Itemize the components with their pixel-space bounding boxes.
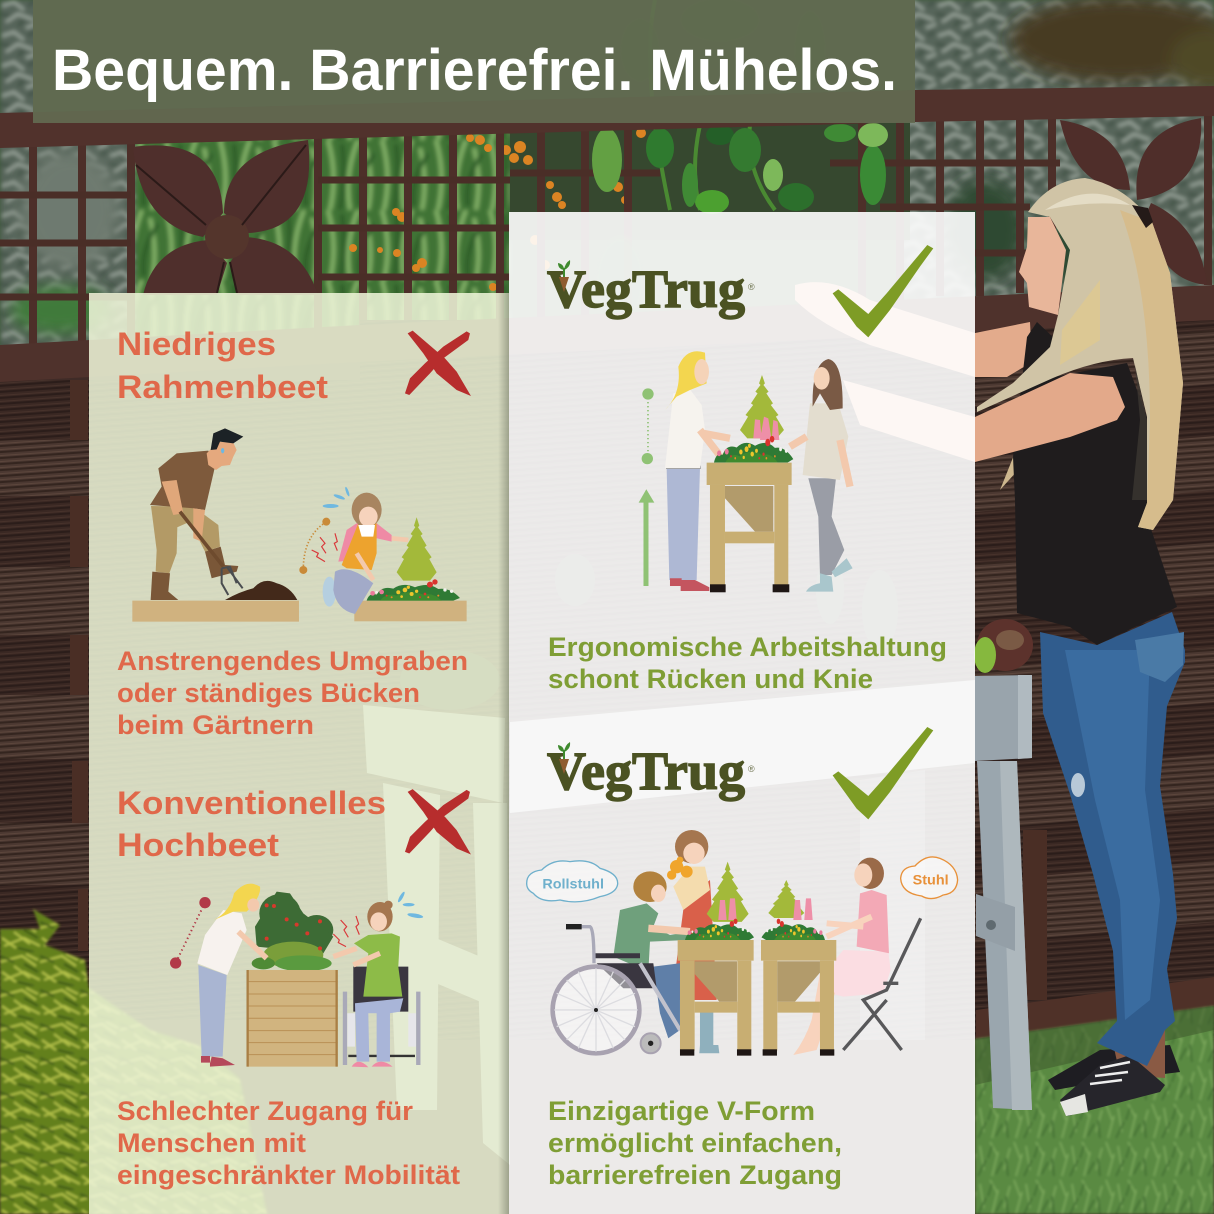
icon: green check 1: [833, 245, 933, 337]
woman in photo: [795, 178, 1185, 1116]
heading: Konventionelles Hochbeet: Hochbeet: [117, 827, 279, 863]
callout: Rollstuhl: Rollstuhl: [542, 875, 604, 891]
strain and posture marks: [170, 891, 424, 969]
grass: [975, 1006, 1214, 1214]
header band: [33, 0, 915, 123]
planters: [678, 940, 836, 1056]
florist woman: [667, 830, 719, 1053]
illustration: standing users at VegTrug planter: [639, 351, 853, 592]
text: Einzigartige V-Form: ermöglicht einfachen,: [548, 1128, 842, 1158]
text: Schlechter Zugang: eingeschränkter Mobilität: [117, 1160, 460, 1190]
text: Anstrengendes Umgraben: oder ständiges Bücken: [117, 678, 420, 708]
plants: [685, 862, 825, 940]
callout: Stuhl: Stuhl: [913, 872, 949, 888]
orange berries: [349, 128, 646, 291]
man: [150, 428, 243, 600]
bush: [0, 909, 267, 1214]
logo: VegTrug 2: VegTrug: [547, 741, 745, 801]
lattice: [33, 116, 1208, 345]
icon: green check 2: [833, 727, 933, 819]
text: Einzigartige V-Form: Einzigartige V-Form: [548, 1096, 815, 1126]
standing woman: [197, 884, 267, 1067]
panel: VegTrug: [509, 212, 975, 1214]
wheelchair woman: [333, 901, 418, 1067]
soil: [225, 581, 297, 600]
text: Ergonomische Arbeitshaltung: Ergonomische Arbeitshaltung: [548, 632, 947, 662]
woman: [323, 493, 408, 614]
text: Anstrengendes Umgraben: beim Gärtnern: [117, 710, 314, 740]
white planter in photo: [363, 675, 1032, 1165]
planter flowers and salad: [400, 554, 1033, 710]
title: Bequem. Barrierefrei. Mühelos.: [52, 38, 897, 103]
back arm: [795, 282, 1032, 377]
left rosette: [133, 140, 318, 295]
text: Ergonomische Arbeitshaltung: schont Rücken und Knie: [548, 664, 873, 694]
height marks: [639, 388, 654, 586]
pepper plant: [592, 0, 888, 560]
foliage behind lattice: [0, 0, 1214, 350]
illustration: digging man and kneeling woman at low beds: [132, 428, 467, 622]
face: [1019, 217, 1066, 315]
black top: [1013, 322, 1177, 645]
fence boards: [0, 285, 1214, 1040]
front arm: [843, 373, 1125, 462]
hair: [977, 178, 1183, 530]
text: Schlechter Zugang: Menschen mit: [117, 1128, 306, 1158]
jeans: [1040, 612, 1185, 1066]
top rail: [0, 86, 1214, 148]
planter: [707, 463, 792, 592]
heading: Niedriges Rahmenbeet: Niedriges: [117, 326, 276, 362]
icon: red cross 1: [405, 331, 471, 396]
heading: Konventionelles Hochbeet: Konventionelles: [117, 785, 386, 821]
seated woman: [793, 858, 921, 1055]
illustration: raised bed with standing and wheelchair users: [170, 884, 424, 1067]
hair lock lower: [1000, 455, 1018, 500]
callout: Stuhl: [901, 857, 958, 899]
icon: red cross 2: [405, 789, 471, 854]
strain marks: [299, 486, 350, 574]
text: Anstrengendes Umgraben: Anstrengendes Umgraben: [117, 646, 468, 676]
plants: [397, 517, 437, 581]
plant continuing above and behind panels: [594, 0, 826, 560]
brown-haired woman: [790, 359, 853, 592]
bed: [247, 970, 338, 1067]
plants: [714, 375, 793, 462]
illustration: wheelchair and chair users at VegTrug planters: [527, 830, 958, 1056]
plant: [252, 892, 333, 971]
text: Einzigartige V-Form: barrierefreien Zugang: [548, 1160, 842, 1190]
heading: Niedriges Rahmenbeet: Rahmenbeet: [117, 369, 328, 405]
right rosette: [1060, 118, 1207, 285]
text: Schlechter Zugang: Schlechter Zugang für: [117, 1096, 413, 1126]
logo: VegTrug 1: ®: [748, 282, 755, 292]
panel: conventional beds: [89, 293, 509, 1214]
logo: VegTrug 1: VegTrug: [547, 259, 745, 319]
blonde woman: [665, 351, 730, 591]
shoes: [1048, 1045, 1180, 1090]
logo: VegTrug 2: ®: [748, 764, 755, 774]
wheelchair user: [553, 871, 690, 1053]
callout: Rollstuhl: [527, 861, 618, 902]
